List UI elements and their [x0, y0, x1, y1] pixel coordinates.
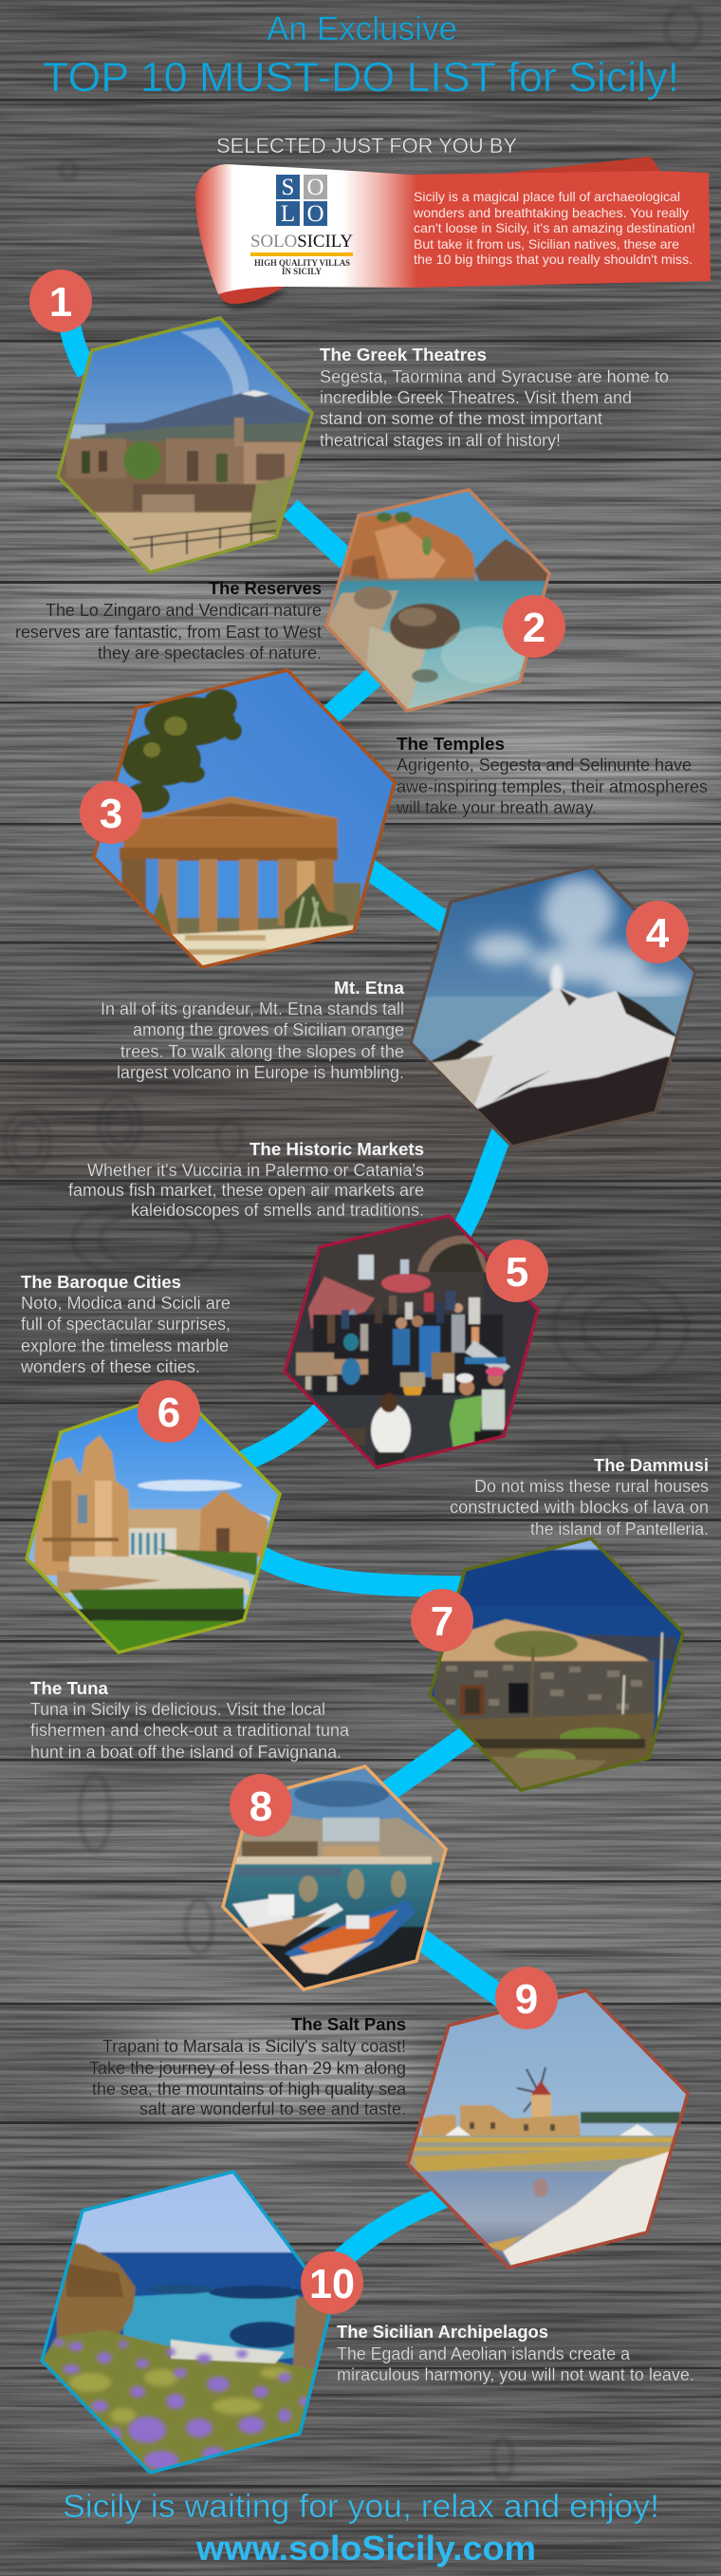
- text block: The Tuna: [30, 1679, 350, 1762]
- banner text: Sicily is a magical place full of archaeological: [414, 189, 680, 204]
- number badge 7: [411, 1589, 473, 1652]
- number badge 8: 8: [250, 1783, 272, 1830]
- text block: The Tuna: The Tuna: [30, 1679, 109, 1698]
- number badge 7: 7: [431, 1598, 453, 1645]
- stop 1 photo: Greek theatre: [58, 318, 312, 572]
- text block: Mt. Etna: [101, 979, 405, 1082]
- text block: The Baroque Cities: Noto, Modica and Scicli are: [21, 1294, 231, 1313]
- text block: The Salt Pans: The Salt Pans: [291, 2015, 406, 2034]
- text block: The Sicilian Archipelagos: [337, 2323, 694, 2384]
- text block: Mt. Etna: among the groves of Sicilian orange: [133, 1020, 404, 1039]
- stop 5 photo: historic market: [285, 1216, 538, 1467]
- stop 9 photo: salt pans with windmill: [408, 1990, 688, 2268]
- text block: The Historic Markets: The Historic Markets: [250, 1140, 424, 1159]
- logo: Solo Sicily: HIGH QUALITY VILLAS: [254, 258, 350, 268]
- number badge 1: [29, 270, 92, 332]
- text block: The Sicilian Archipelagos: The Sicilian Archipelagos: [337, 2323, 548, 2342]
- number badge 5: [486, 1240, 548, 1302]
- text block: Mt. Etna: trees. To walk along the slopes of the: [120, 1042, 404, 1061]
- number badge 9: [495, 1967, 558, 2029]
- text block: The Sicilian Archipelagos: miraculous harmony, you will not want to leave.: [337, 2365, 694, 2384]
- text block: The Dammusi: the island of Pantelleria.: [530, 1520, 709, 1539]
- stop 8 photo: fishing harbour: [223, 1766, 446, 1989]
- stop 6 photo: baroque cathedral: [27, 1391, 280, 1652]
- logo: Solo Sicily: IN SICILY: [282, 267, 322, 276]
- logo: Solo Sicily: O: [306, 201, 324, 227]
- stop 7 photo: dammuso house: [430, 1539, 683, 1790]
- text block: The Temples: The Temples: [397, 735, 505, 754]
- text block: The Reserves: The Reserves: [209, 579, 322, 598]
- logo: Solo Sicily: L: [281, 201, 295, 227]
- subtitle: SELECTED JUST FOR YOU BY: [216, 134, 517, 158]
- banner text: the 10 big things that you really shouldn't miss.: [414, 252, 693, 267]
- number badge 3: [80, 781, 142, 844]
- text block: The Salt Pans: the sea, the mountains of high quality sea: [92, 2080, 407, 2099]
- text block: The Dammusi: The Dammusi: [594, 1456, 709, 1475]
- logo: Solo Sicily: O: [306, 175, 324, 200]
- number badge 6: 6: [157, 1390, 180, 1436]
- number badge 8: [230, 1774, 292, 1837]
- text block: The Reserves: [15, 579, 322, 663]
- text block: The Salt Pans: Trapani to Marsala is Sicily's salty coast!: [102, 2037, 406, 2056]
- text block: The Historic Markets: [68, 1140, 424, 1220]
- text block: Mt. Etna: Mt. Etna: [334, 979, 405, 998]
- route: blue connecting ribbon: [70, 327, 503, 2268]
- number badge 4: [626, 901, 689, 963]
- text block: The Reserves: reserves are fantastic, from East to West: [15, 623, 322, 642]
- text block: The Salt Pans: salt are wonderful to see and taste.: [139, 2100, 406, 2119]
- number badge 2: [503, 595, 565, 658]
- text block: The Sicilian Archipelagos: The Egadi and Aeolian islands create a: [337, 2344, 631, 2363]
- text block: The Historic Markets: kaleidoscopes of smells and traditions.: [131, 1201, 424, 1220]
- text block: The Baroque Cities: full of spectacular surprises,: [21, 1315, 231, 1334]
- text block: The Baroque Cities: explore the timeless marble: [21, 1336, 229, 1355]
- text block: The Dammusi: Do not miss these rural houses: [474, 1477, 709, 1496]
- text block: The Baroque Cities: The Baroque Cities: [21, 1273, 181, 1292]
- title: An Exclusive: An Exclusive: [267, 10, 457, 47]
- number badge 4: 4: [646, 910, 670, 957]
- text block: The Temples: will take your breath away.: [396, 798, 597, 817]
- text block: The Greek Theatres: Segesta, Taormina and Syracuse are home to: [320, 367, 669, 386]
- text block: The Dammusi: [450, 1456, 709, 1539]
- text block: The Salt Pans: [89, 2015, 407, 2119]
- logo: Solo Sicily: SOLOSICILY: [250, 232, 353, 252]
- number badge 9: 9: [515, 1976, 538, 2023]
- text block: The Greek Theatres: The Greek Theatres: [320, 345, 487, 364]
- stop 4 photo: Mount Etna: [411, 867, 695, 1147]
- logo: Solo Sicily: [250, 175, 353, 276]
- text block: The Dammusi: constructed with blocks of lava on: [450, 1498, 709, 1517]
- number badge 1: 1: [49, 279, 72, 326]
- text block: The Greek Theatres: theatrical stages in all of history!: [320, 431, 561, 450]
- stop 2 photo: nature reserve cove: [326, 490, 549, 711]
- stop 10 photo: archipelago coast and flowers: [42, 2172, 332, 2473]
- text block: The Temples: [396, 735, 708, 817]
- number badge 2: 2: [523, 605, 545, 651]
- stop 3 photo: Greek temple: [94, 670, 395, 967]
- text block: The Tuna: hunt in a boat off the island of Favignana.: [30, 1743, 342, 1762]
- footer: website: www.soloSicily.com: [195, 2529, 536, 2567]
- number badge 3: 3: [100, 791, 122, 837]
- banner text: [413, 189, 695, 267]
- text block: The Historic Markets: famous fish market, these open air markets are: [68, 1181, 424, 1200]
- text block: Mt. Etna: In all of its grandeur, Mt. Etna stands tall: [101, 999, 404, 1018]
- text block: The Salt Pans: Take the journey of less than 29 km along: [89, 2059, 406, 2078]
- text block: The Temples: Agrigento, Segesta and Selinunte have: [397, 756, 692, 775]
- text block: Mt. Etna: largest volcano in Europe is humbling.: [117, 1063, 404, 1082]
- text block: The Temples: awe-inspiring temples, their atmospheres: [397, 777, 708, 796]
- number badge 10: 10: [309, 2261, 355, 2307]
- banner text: But take it from us, Sicilian natives, these are: [414, 236, 679, 252]
- title: Top 10 Must-Do List: TOP 10 MUST-DO LIST for Sicily!: [43, 54, 679, 101]
- banner text: wonders and breathtaking beaches. You really: [413, 205, 689, 220]
- number badge 6: [138, 1380, 200, 1443]
- logo: Solo Sicily: S: [282, 175, 294, 200]
- text block: The Tuna: fishermen and check-out a traditional tuna: [30, 1721, 350, 1740]
- banner text: can't loose in Sicily, it's an amazing destination!: [414, 220, 695, 235]
- text block: The Greek Theatres: stand on some of the most important: [320, 409, 602, 428]
- footer: closing line: Sicily is waiting for you, relax and enjoy!: [63, 2489, 659, 2525]
- text block: The Baroque Cities: [20, 1273, 231, 1376]
- text block: The Tuna: Tuna in Sicily is delicious. Visit the local: [30, 1700, 325, 1719]
- number badge 10: [301, 2251, 363, 2314]
- banner: ribbon with logo and intro: [195, 157, 711, 309]
- text block: The Reserves: they are spectacles of nature.: [98, 644, 322, 663]
- number badge 5: 5: [506, 1249, 528, 1296]
- text block: The Historic Markets: Whether it's Vucciria in Palermo or Catania's: [87, 1161, 424, 1180]
- text block: The Greek Theatres: [320, 345, 669, 450]
- text block: The Greek Theatres: incredible Greek Theatres. Visit them and: [320, 388, 632, 407]
- text block: The Reserves: The Lo Zingaro and Vendicari nature: [46, 601, 322, 620]
- text block: The Baroque Cities: wonders of these cities.: [20, 1357, 200, 1376]
